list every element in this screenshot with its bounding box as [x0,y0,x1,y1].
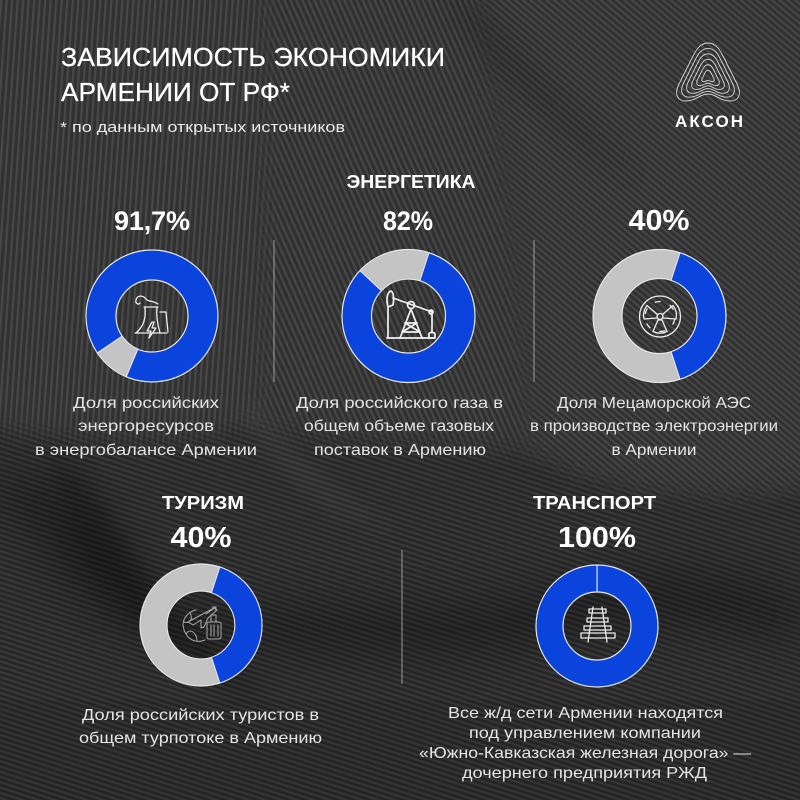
caption: nuclear plant: Доля Мецаморской АЭС [557,395,751,412]
stat: 40% nuclear: 40% [628,205,690,237]
caption: nuclear plant [530,395,778,459]
caption: railway: Все ж/д сети Армении находятся [448,705,723,722]
heading: tourism: ТУРИЗМ [162,493,244,513]
logo: Axon [675,43,743,131]
donut: russian tourists share [140,564,262,686]
icon: globe, plane and suitcase [183,607,221,641]
caption: gas supply: Доля российского газа в [296,395,503,412]
caption: railway: под управлением компании [469,725,701,742]
caption: tourists [79,707,322,747]
caption: gas supply: общем объеме газовых [304,418,494,435]
donut: russian energy share [86,250,218,382]
subtitle: sources note: * по данным открытых источников [60,119,345,136]
icon: radiation [640,296,680,337]
title: АРМЕНИИ ОТ РФ* [61,77,290,107]
heading: transport: ТРАНСПОРТ [533,493,656,513]
caption: tourists: общем турпотоке в Армению [79,730,322,747]
caption: nuclear plant: в Армении [612,442,696,459]
caption: tourists: Доля российских туристов в [82,707,319,724]
caption: railway: «Южно-Кавказская железная дорога» — [419,745,751,762]
donut: Metsamor nuclear plant share [593,250,726,382]
icon: power plant [135,296,168,338]
title: ЗАВИСИМОСТЬ ЭКОНОМИКИ [61,42,445,72]
caption: energy resources: энергоресурсов [78,418,214,435]
separator [274,240,275,382]
title [61,42,445,107]
caption: nuclear plant: в производстве электроэнергии [530,418,778,435]
caption: railway [419,705,751,782]
icon: oil pump [387,291,435,338]
logo: Axon: АКСОН [675,112,743,131]
separator [534,240,535,382]
caption: energy resources: Доля российских [73,395,219,412]
caption: railway: дочернего предприятия РЖД [462,765,707,782]
caption: energy resources [35,395,257,459]
stat: 91,7%: 91,7% [114,206,190,236]
donut: railway share [536,565,658,687]
caption: energy resources: в энергобалансе Армении [35,442,257,459]
stat: 40% tourism: 40% [170,522,232,554]
donut: russian gas share [342,250,475,382]
stat: 82%: 82% [383,206,433,236]
caption: gas supply: поставок в Армению [314,442,486,459]
caption: gas supply [296,395,503,459]
separator [402,550,403,684]
stat: 100%: 100% [558,522,636,554]
heading: energy: ЭНЕРГЕТИКА [346,172,476,192]
icon: railway tracks [581,607,615,642]
